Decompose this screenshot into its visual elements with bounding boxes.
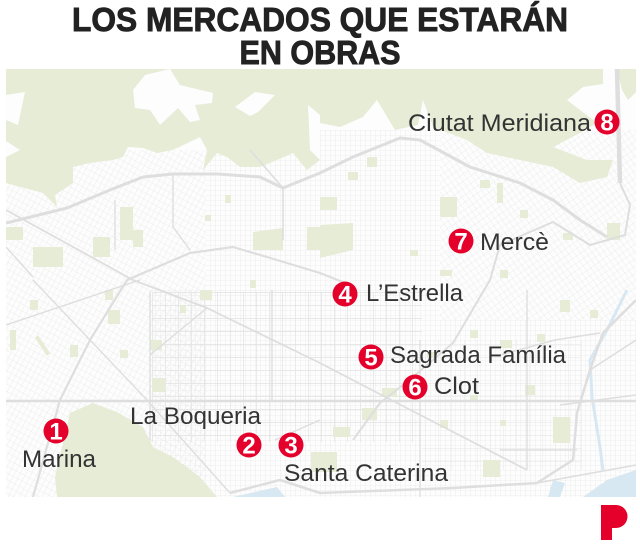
white clearing in hills — [6, 69, 320, 160]
marker 2 La Boqueria — [236, 432, 262, 460]
label Santa Caterina: Santa Caterina — [284, 460, 449, 487]
label Mercè: Mercè — [480, 229, 549, 256]
label Marina: Marina — [22, 446, 97, 473]
street mesh — [6, 130, 636, 497]
marker 1 Marina: 1 — [49, 418, 63, 446]
marker 4 L'Estrella: 4 — [338, 282, 352, 308]
scattered green patches — [6, 157, 620, 477]
park areas — [6, 69, 636, 497]
marker 3 Santa Caterina: 3 — [284, 432, 298, 460]
marker 1 Marina — [44, 418, 68, 446]
label Clot: Clot — [434, 373, 479, 400]
marker 8 Ciutat Meridiana — [594, 110, 620, 136]
label Sagrada Família: Sagrada Família — [390, 342, 567, 369]
Montjuic — [55, 403, 217, 497]
label La Boqueria: La Boqueria — [130, 403, 262, 430]
marker 2 La Boqueria: 2 — [242, 432, 256, 460]
label L'Estrella: L’Estrella — [366, 280, 464, 307]
marker 6 Clot — [402, 374, 428, 402]
marker 7 Mercè — [448, 228, 474, 256]
map of Barcelona — [6, 69, 636, 497]
main roads — [6, 69, 636, 497]
title: EN OBRAS — [240, 34, 400, 71]
marker 7 Mercè: 7 — [454, 228, 468, 256]
marker 5 Sagrada Família: 5 — [364, 344, 378, 372]
title: LOS MERCADOS QUE ESTARÁN — [72, 1, 568, 38]
marker 3 Santa Caterina — [278, 432, 304, 460]
sea and river — [233, 290, 636, 497]
marker 5 Sagrada Família — [358, 344, 384, 372]
Collserola hills — [6, 69, 613, 207]
marker 6 Clot: 6 — [408, 374, 422, 402]
marker 4 L'Estrella — [332, 282, 358, 308]
title — [72, 1, 568, 71]
label Ciutat Meridiana: Ciutat Meridiana — [408, 110, 592, 137]
logo — [601, 505, 628, 540]
marker 8 Ciutat Meridiana: 8 — [600, 110, 614, 136]
